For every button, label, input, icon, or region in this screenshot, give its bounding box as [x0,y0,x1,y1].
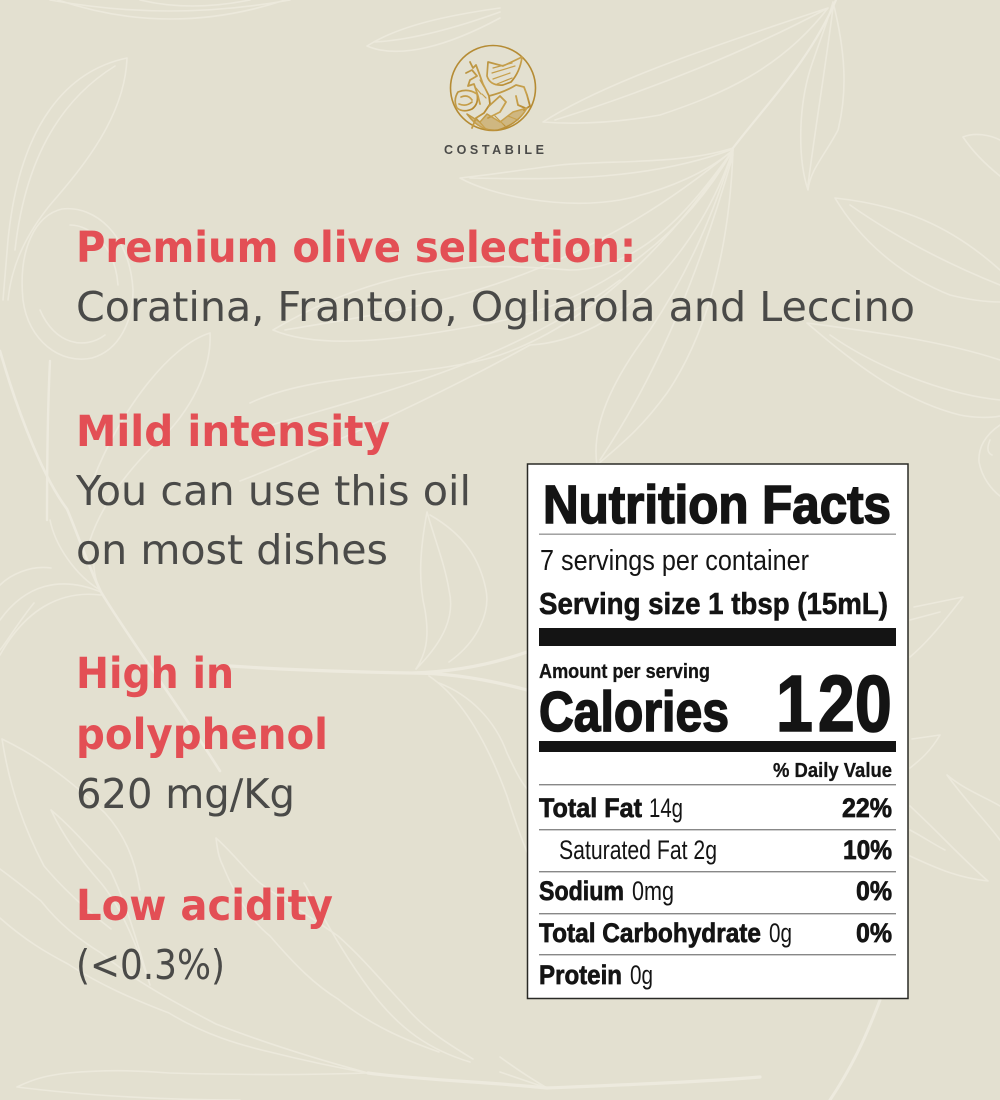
body text: You can use this oil [75,467,471,515]
panel: nutrition facts label [528,464,908,998]
icon: griffin roundel [450,46,536,130]
heading: Low acidity [76,881,333,931]
row: protein: Protein [539,960,622,990]
body text [75,467,471,574]
row: total fat [539,793,892,823]
row: total carbohydrate [539,918,892,948]
row: sodium: 0mg [632,876,674,906]
row: saturated fat: Saturated Fat 2g [559,835,717,865]
text block: polyphenol [76,649,328,818]
heading: Mild intensity [76,407,390,457]
body text: on most dishes [76,526,388,574]
row: sodium [539,876,892,906]
text block: olive selection [76,223,915,331]
row: sodium: 0% [856,876,892,906]
daily value header: % Daily Value [773,760,892,782]
text block: acidity [76,881,333,989]
amount per serving: Amount per serving [539,661,710,683]
row: total carbohydrate: Total Carbohydrate [539,918,761,948]
nutrition title: Nutrition Facts [543,475,891,535]
body text: 620 mg/Kg [76,770,295,818]
body text: Coratina, Frantoio, Ogliarola and Leccino [76,283,915,331]
servings per container: 7 servings per container [540,545,809,577]
heading: Premium olive selection: [76,223,636,273]
brand name: COSTABILE [444,143,544,157]
row: protein: 0g [630,960,653,990]
heading: High in [76,649,234,699]
logo: Costabile griffin emblem [444,46,544,157]
serving size: Serving size 1 tbsp (15mL) [539,586,888,621]
calories value: 120 [776,658,892,748]
heading: polyphenol [76,710,328,760]
heading [76,649,328,760]
calories label: Calories [539,680,729,744]
row: total fat: Total Fat [539,793,642,823]
row: saturated fat: 10% [843,835,892,865]
row: total carbohydrate: 0% [856,918,892,948]
row: total fat: 14g [649,793,683,823]
body text: (<0.3%) [76,941,225,989]
row: total carbohydrate: 0g [769,918,792,948]
row: saturated fat [559,835,892,865]
row: total fat: 22% [842,793,892,823]
row: sodium: Sodium [539,876,624,906]
text block: intensity [75,407,471,574]
